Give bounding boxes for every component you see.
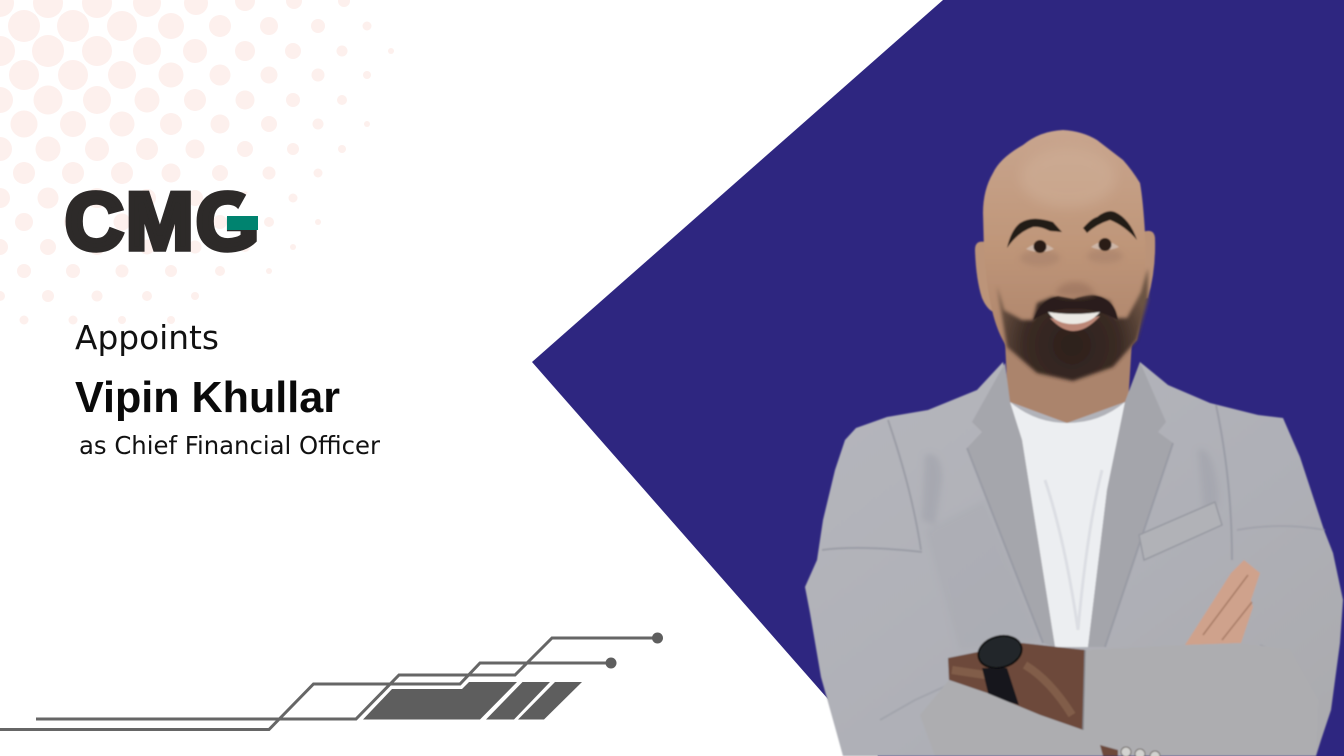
ear right <box>1140 231 1155 300</box>
logo wordmark: G <box>196 177 259 267</box>
right eye <box>1091 238 1119 251</box>
jacket cuff right <box>1083 643 1318 756</box>
cuff edge <box>1083 650 1085 730</box>
lower circuit trace <box>0 663 611 730</box>
right iris <box>1098 238 1112 251</box>
hand with fingers <box>1185 560 1260 645</box>
eye socket shadows <box>1020 249 1123 266</box>
portrait of Vipin Khullar <box>805 340 1343 756</box>
circuit block large <box>363 682 517 720</box>
text: as Chief Financial Officer: as Chief Financial Officer <box>79 431 381 460</box>
circuit block middle <box>486 682 550 720</box>
beard <box>997 268 1148 381</box>
logo wordmark: C <box>65 177 124 267</box>
logo wordmark: M <box>126 177 193 267</box>
face and skull <box>983 130 1145 380</box>
circuit line graphic <box>0 632 663 730</box>
watch strap <box>982 668 1019 705</box>
wrist skin at bottom <box>1100 745 1118 756</box>
t-shirt folds <box>1045 470 1102 630</box>
breast pocket <box>1139 502 1222 560</box>
watch <box>975 631 1025 705</box>
forearm highlights <box>952 665 1072 715</box>
jacket body <box>805 362 1343 756</box>
left eyebrow <box>1007 219 1062 248</box>
navy arrow background shape <box>532 0 1344 756</box>
CMG logo <box>65 177 264 267</box>
forehead highlight <box>1020 148 1116 208</box>
left iris <box>1034 240 1046 253</box>
lower lip <box>1050 316 1100 331</box>
finger lines <box>1203 575 1252 640</box>
nose shadow <box>1055 282 1095 297</box>
logo green bar <box>227 216 258 230</box>
text: Appoints: Appoints <box>75 318 219 357</box>
circuit block right <box>518 682 582 720</box>
trace end dot lower <box>606 658 616 668</box>
right eyebrow <box>1083 211 1137 240</box>
right lapel <box>1088 362 1173 647</box>
lower left sleeve <box>920 680 1100 756</box>
neck <box>1005 340 1132 428</box>
right eye white <box>1091 242 1119 250</box>
white t-shirt <box>1010 402 1125 647</box>
halftone dot pattern <box>0 0 394 324</box>
jacket soft shading <box>922 450 1218 650</box>
teeth <box>1048 312 1100 324</box>
left eye <box>1026 240 1054 253</box>
ear left <box>975 242 998 313</box>
left eye white <box>1026 244 1054 252</box>
text: Vipin Khullar: Vipin Khullar <box>75 373 340 422</box>
trace end dot upper <box>652 632 663 644</box>
forearm <box>948 643 1085 730</box>
upper circuit trace <box>36 638 657 719</box>
left lapel <box>967 363 1055 647</box>
head <box>975 130 1155 381</box>
moustache <box>1033 295 1118 320</box>
jacket crease lines <box>822 405 1325 720</box>
sleeve buttons <box>1121 747 1160 756</box>
logo G notch <box>226 188 264 216</box>
watch face <box>975 631 1025 673</box>
